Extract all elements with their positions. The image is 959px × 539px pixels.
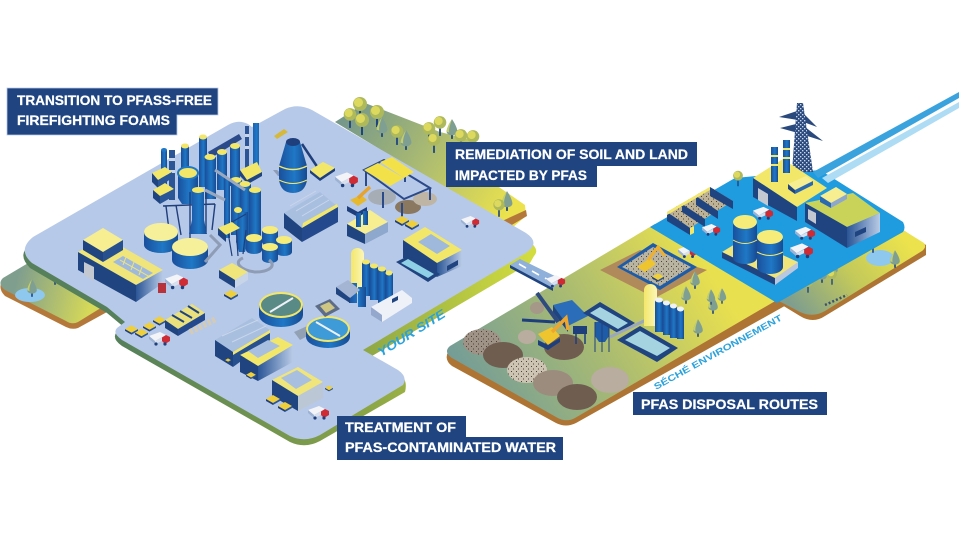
conifer trees [681, 271, 726, 337]
bunkers [667, 187, 733, 235]
callout: firefighting foams [7, 88, 218, 135]
shed and excavation works [335, 157, 437, 217]
building: west plant [78, 228, 163, 302]
building: warehouse [403, 227, 462, 277]
panel: right meadow [777, 230, 926, 320]
callout: water treatment [337, 416, 563, 460]
storage tanks [722, 215, 798, 285]
silo row with pools and truck [336, 248, 440, 322]
panel: energy zone pad [650, 92, 959, 303]
vehicles [702, 207, 815, 258]
stockpiles [463, 302, 629, 410]
clarifiers [259, 292, 350, 348]
tanker trucks and small building [158, 263, 248, 293]
panel: your site pad [23, 106, 536, 445]
treatment halls [215, 318, 333, 420]
callout: firefighting foams: TRANSITION TO PFASS-FREE [17, 93, 212, 108]
callout: disposal routes [633, 392, 827, 415]
callout: disposal routes: PFAS DISPOSAL ROUTES [641, 397, 818, 412]
cone silo and conveyor [273, 129, 335, 193]
panel: meadow behind site [335, 97, 527, 228]
tanks and columns cluster [144, 123, 292, 272]
callout: soil and land remediation [446, 142, 697, 187]
callout: soil and land remediation: IMPACTED BY PFAS [455, 168, 587, 183]
callout: soil and land remediation: REMEDIATION OF SOIL AND LAND [455, 147, 688, 162]
building: treatment block [347, 210, 479, 244]
landfill pit [600, 243, 707, 298]
crushing plant and excavator [522, 293, 609, 352]
callout: firefighting foams: FIREFIGHTING FOAMS [17, 113, 170, 128]
road and truck between sites [510, 259, 565, 291]
Séché Environnement label: SÉCHÉ ENVIRONNEMENT [652, 312, 784, 392]
pad edge [447, 224, 790, 426]
pad surface [447, 227, 777, 420]
callout: water treatment: PFAS-CONTAMINATED WATER [345, 440, 556, 455]
pad surface [25, 106, 533, 439]
your site label: YOUR SITE [375, 306, 449, 360]
pylon [779, 103, 823, 172]
disposal silos [644, 284, 684, 339]
parking and containers [125, 290, 238, 346]
settling pools [583, 302, 678, 362]
pad edge [23, 115, 536, 445]
building: solar hall [284, 191, 338, 242]
panel: left pond meadow [0, 256, 110, 329]
power plant [753, 140, 827, 221]
green roof building [805, 187, 880, 248]
power lines [813, 92, 959, 183]
callout: water treatment: TREATMENT OF [345, 420, 456, 435]
panel: Séché Environnement pad [447, 224, 790, 426]
